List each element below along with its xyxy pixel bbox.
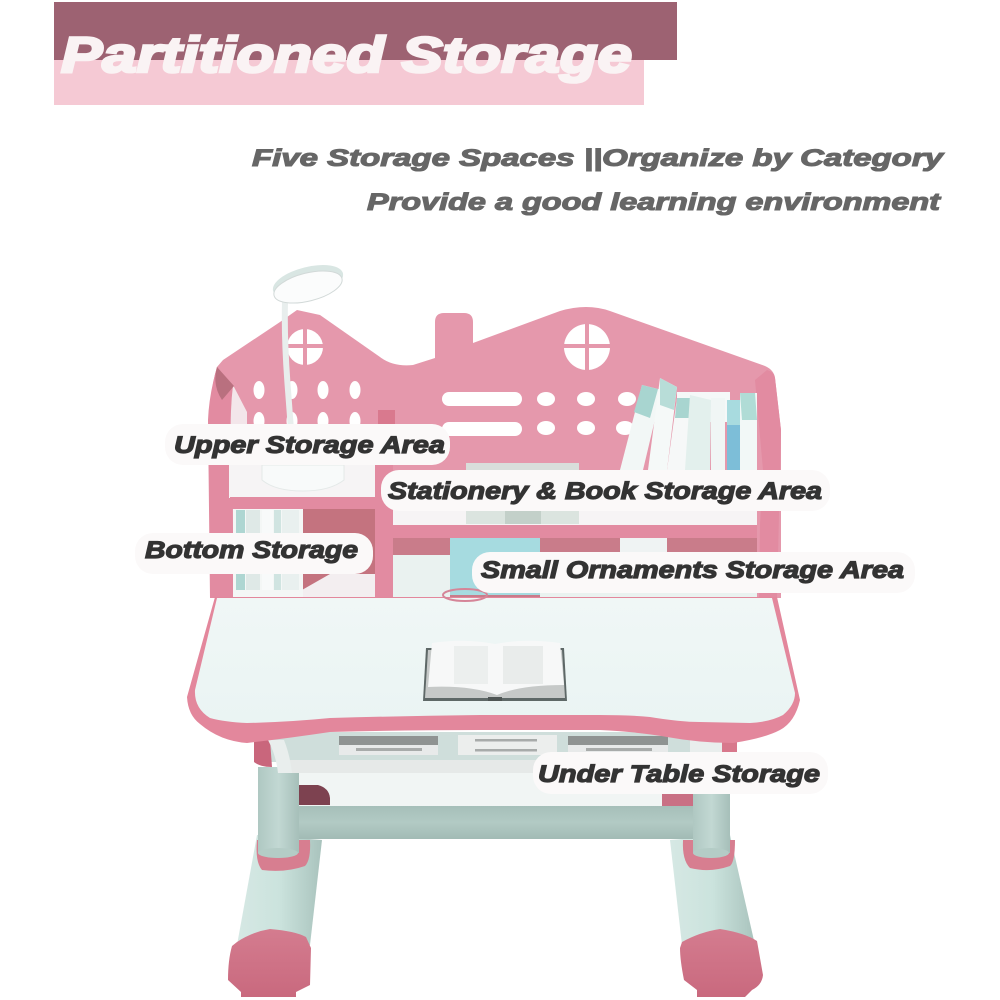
ornament ring [443, 589, 487, 601]
label: stationery and book storage area [381, 470, 830, 511]
hutch back panel [210, 307, 781, 598]
label: bottom storage: Bottom Storage [145, 537, 358, 564]
under table storage [254, 732, 737, 773]
books on shelf [620, 378, 757, 470]
left side panel [208, 367, 235, 598]
subtitle [252, 145, 945, 216]
label: bottom storage [135, 533, 373, 574]
title banner [54, 2, 677, 105]
main shelf [393, 463, 757, 598]
desk illustration [187, 259, 800, 997]
label: upper storage area: Upper Storage Area [174, 432, 445, 459]
left shelves [229, 465, 375, 598]
label: under table storage: Under Table Storage [538, 761, 820, 788]
label: upper storage area [165, 424, 450, 465]
open book [423, 641, 567, 701]
label: stationery and book storage area: Stationery & Book Storage Area [388, 478, 822, 505]
pegboard holes [254, 381, 636, 436]
label: small ornaments storage area [472, 552, 915, 593]
lamp [262, 259, 347, 491]
window right [564, 324, 610, 370]
window left [287, 329, 323, 365]
subtitle: Provide a good learning environment [367, 189, 941, 216]
legs and base [228, 767, 763, 997]
center divider [375, 465, 393, 598]
label: small ornaments storage area: Small Ornaments Storage Area [481, 557, 904, 584]
divider tab [378, 410, 395, 426]
right side panel [755, 370, 781, 598]
desktop [187, 597, 800, 743]
title banner: Partitioned Storage [61, 27, 632, 83]
label: under table storage [533, 752, 828, 794]
subtitle: Five Storage Spaces ||Organize by Category [252, 145, 945, 172]
